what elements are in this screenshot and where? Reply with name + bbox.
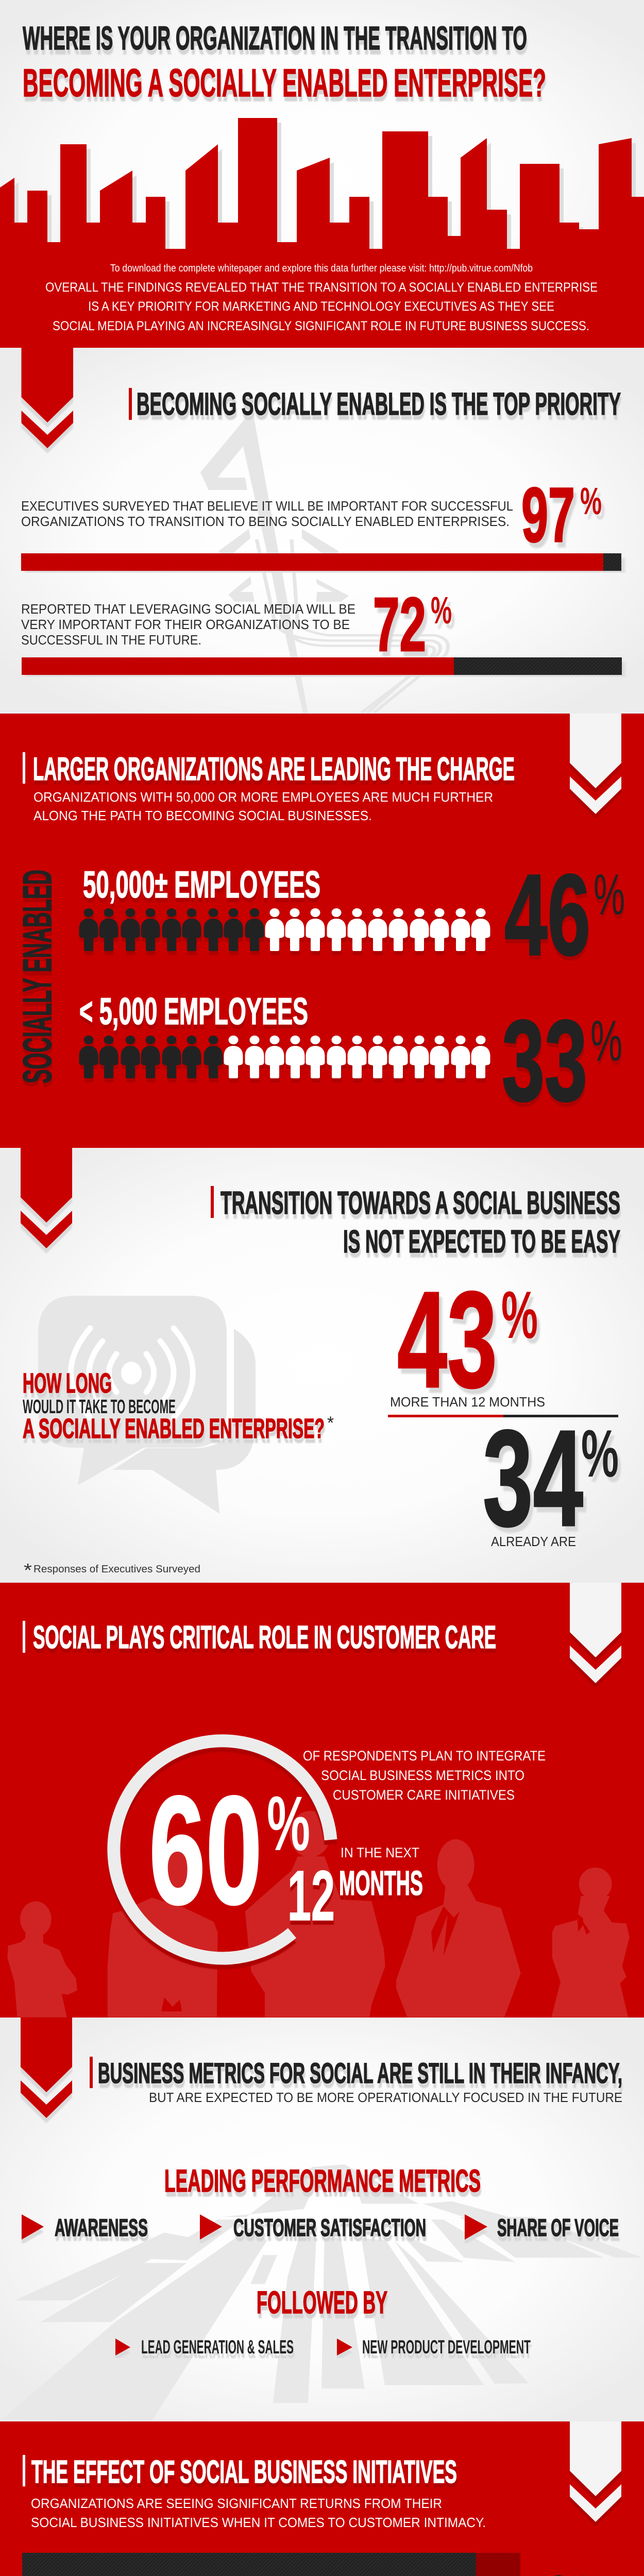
description: IN THE NEXT: [341, 1845, 419, 1860]
footnote: *: [24, 1560, 32, 1581]
panel: becoming socially enabled: [0, 348, 644, 714]
text: 72 percent statement: SUCCESSFUL IN THE FUTURE.: [21, 632, 201, 648]
description: SOCIAL BUSINESS METRICS INTO: [321, 1768, 524, 1783]
item: new product development: [337, 2336, 531, 2358]
description: OF RESPONDENTS PLAN TO INTEGRATE: [303, 1748, 546, 1764]
stat: 60%: %: [267, 1780, 310, 1867]
description: [303, 1748, 546, 1860]
panel: business metrics: [0, 2018, 644, 2421]
item: awareness: [22, 2214, 148, 2241]
ribbon chevron: [570, 2421, 621, 2522]
heading accent bar: [23, 1621, 25, 1653]
item: customer satisfaction: CUSTOMER SATISFACTION: [233, 2214, 426, 2241]
heading: followed by: FOLLOWED BY: [257, 2285, 387, 2320]
pictogram: 46 percent of people: [79, 908, 490, 951]
ribbon chevron: [21, 1148, 72, 1248]
vertical label: SOCIALLY ENABLED: [14, 870, 60, 1083]
icon: arrow: [22, 2214, 44, 2240]
item: lead generation and sales: [115, 2336, 294, 2358]
stat: 72%: 72: [373, 582, 426, 667]
stat: 43%: %: [501, 1277, 538, 1352]
city skyline: [0, 118, 644, 348]
subheading: ALONG THE PATH TO BECOMING SOCIAL BUSINESSES.: [33, 808, 372, 823]
ribbon chevron: [570, 714, 621, 814]
stat: 34%: 34: [483, 1402, 584, 1555]
intro text: [45, 280, 598, 333]
stat: 97%: %: [580, 480, 602, 522]
stat: 33%: 33: [502, 996, 587, 1125]
icon: arrow: [337, 2338, 352, 2355]
stat: 72%: %: [431, 589, 452, 632]
subheading: BUT ARE EXPECTED TO BE MORE OPERATIONALLY FOCUSED IN THE FUTURE: [149, 2090, 622, 2105]
text: 97 percent statement: ORGANIZATIONS TO TRANSITION TO BEING SOCIALLY ENABLED ENTERPRISES.: [21, 514, 510, 529]
footnote: Responses of Executives Surveyed: [33, 1564, 200, 1575]
item: lead generation and sales: LEAD GENERATION & SALES: [141, 2336, 294, 2358]
subheading: SOCIAL BUSINESS INITIATIVES WHEN IT COMES TO CUSTOMER INTIMACY.: [31, 2515, 486, 2530]
question: A SOCIALLY ENABLED ENTERPRISE?: [23, 1413, 325, 1444]
description: CUSTOMER CARE INITIATIVES: [333, 1787, 515, 1803]
watermark: arrows: [200, 417, 448, 714]
heading: [221, 1185, 620, 1260]
subheading: ORGANIZATIONS WITH 50,000 OR MORE EMPLOYEES ARE MUCH FURTHER: [33, 789, 493, 805]
stat: 34%: %: [581, 1416, 619, 1491]
panel: effect of initiatives: [0, 2421, 644, 2576]
subheading: [33, 789, 493, 823]
label: 50,000+ employees: 50,000± EMPLOYEES: [83, 864, 320, 906]
stat: 97%: 97: [521, 471, 575, 558]
heading accent bar: [90, 2057, 93, 2088]
panel: header: [0, 0, 644, 348]
ribbon chevron: [21, 2018, 72, 2118]
question: WOULD IT TAKE TO BECOME: [23, 1396, 176, 1418]
heading accent bar: [129, 388, 132, 420]
watermark: speech bubbles: [38, 1296, 256, 1514]
text: 72 percent statement: [21, 601, 355, 648]
icon: arrow: [200, 2214, 222, 2240]
item: customer satisfaction: [200, 2214, 426, 2241]
bar chart: 72%: [22, 657, 622, 675]
question: HOW LONG: [23, 1368, 112, 1399]
panel: larger organizations: [0, 714, 644, 1148]
stat: 33%: %: [590, 1009, 622, 1073]
progress ring: 60 percent: [114, 1741, 331, 1958]
download note: To download the complete whitepaper and explore this data further please visit: http://pub.vitrue.com/Nfob: [110, 263, 533, 274]
label: under 5,000 employees: < 5,000 EMPLOYEES: [79, 991, 308, 1032]
asterisk: *: [327, 1413, 334, 1433]
text: 97 percent statement: [21, 498, 513, 529]
text: 72 percent statement: VERY IMPORTANT FOR THEIR ORGANIZATIONS TO BE: [21, 617, 350, 632]
ribbon chevron: [570, 1583, 621, 1683]
heading accent bar: [23, 2455, 25, 2486]
item: awareness: AWARENESS: [55, 2214, 148, 2241]
silhouettes of business people: [7, 1811, 630, 2018]
watermark: road lines: [2, 2164, 642, 2420]
panel: customer care: [0, 1583, 644, 2018]
pictogram: 33 percent of people: [79, 1036, 490, 1078]
ribbon chevron: [22, 348, 73, 448]
text: 72 percent statement: REPORTED THAT LEVERAGING SOCIAL MEDIA WILL BE: [21, 601, 355, 617]
stat: 12 months: 12: [287, 1856, 335, 1936]
label: already are: ALREADY ARE: [491, 1534, 576, 1549]
stat: 46%: %: [594, 862, 625, 927]
item: share of voice: [465, 2214, 619, 2241]
stat: 12 months: MONTHS: [339, 1864, 423, 1903]
footnote: [24, 1560, 200, 1581]
stat: 12 months: [287, 1856, 423, 1936]
heading accent bar: [211, 1186, 214, 1218]
subheading: [31, 2496, 486, 2530]
stat: 60%: 60: [149, 1764, 262, 1937]
bar chart: 97%: [21, 553, 621, 571]
divider: [388, 1415, 618, 1417]
subheading: ORGANIZATIONS ARE SEEING SIGNIFICANT RETURNS FROM THEIR: [31, 2496, 442, 2511]
intro text: SOCIAL MEDIA PLAYING AN INCREASINGLY SIGNIFICANT ROLE IN FUTURE BUSINESS SUCCESS.: [53, 319, 589, 333]
stat: 43%: 43: [397, 1263, 497, 1416]
heading accent bar: [23, 752, 25, 784]
icon: arrow: [465, 2214, 487, 2240]
icon: arrow: [115, 2338, 130, 2355]
panel: transition not easy: [0, 1148, 644, 1583]
intro text: IS A KEY PRIORITY FOR MARKETING AND TECHNOLOGY EXECUTIVES AS THEY SEE: [88, 299, 554, 314]
bar: greater visibility: [22, 2553, 520, 2576]
stat: 46%: 46: [504, 851, 590, 979]
text: 97 percent statement: EXECUTIVES SURVEYED THAT BELIEVE IT WILL BE IMPORTANT FOR SUCCESSFUL: [21, 498, 513, 514]
label: more than 12 months: MORE THAN 12 MONTHS: [390, 1394, 545, 1410]
question: [23, 1368, 325, 1444]
